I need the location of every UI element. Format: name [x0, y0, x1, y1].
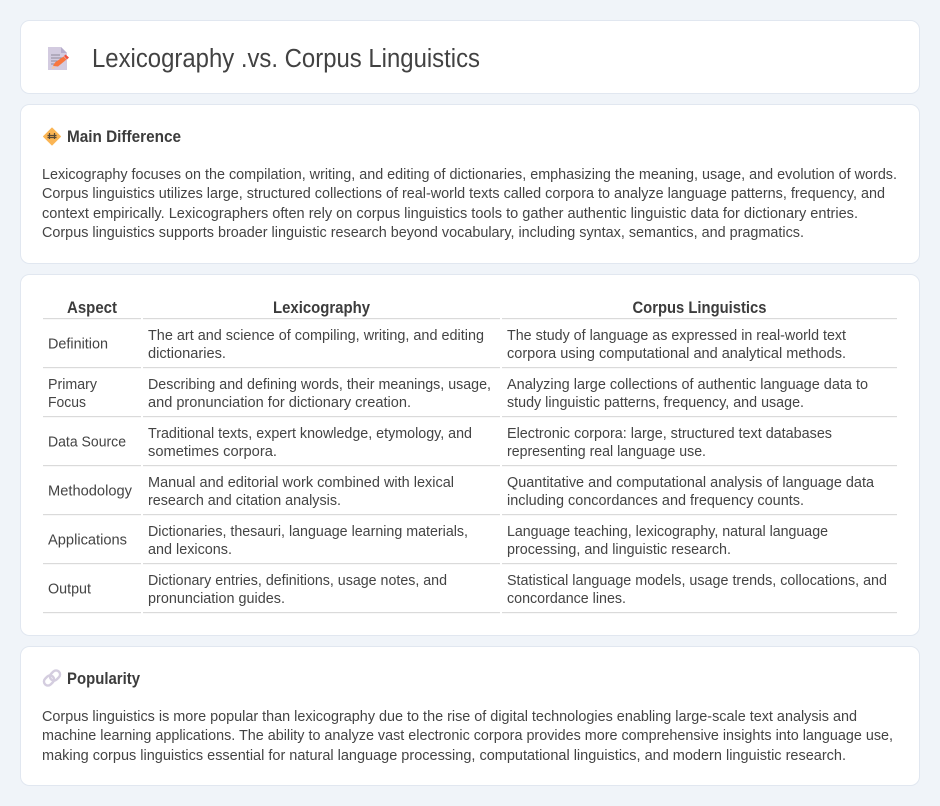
table row: applications: Applications	[48, 532, 127, 548]
heading: main difference: Main Difference	[67, 128, 181, 146]
table header row: Aspect	[67, 299, 117, 317]
table row: definition	[43, 328, 897, 368]
panel: popularity	[20, 646, 920, 786]
table row: data source: Electronic corpora: large, structured text databases	[507, 426, 832, 442]
text block: popularity paragraph	[42, 708, 893, 764]
title: Lexicography .vs. Corpus Linguistics	[92, 45, 480, 73]
text block: popularity paragraph: machine learning applications. The ability to analyze vast electronic corpora provides more comprehensive insights into language use,	[42, 727, 893, 744]
text block: main difference paragraph: context empirically. Lexicographers often rely on corpus linguistics tools to gather authentic linguistic data for dictionary entries.	[42, 205, 858, 222]
icon: link	[42, 669, 62, 687]
table row: applications: Dictionaries, thesauri, language learning materials,	[148, 524, 468, 540]
table row: primary focus: Describing and defining words, their meanings, usage,	[148, 377, 491, 393]
table row: output: pronunciation guides.	[148, 591, 285, 607]
table row: primary focus	[43, 377, 897, 417]
table row: primary focus: and pronunciation for dictionary creation.	[148, 395, 411, 411]
text block: main difference paragraph: Lexicography focuses on the compilation, writing, and editing of dictionaries, emphasizing the meaning, usage, and evolution of words.	[42, 166, 897, 183]
table row: definition: The art and science of compiling, writing, and editing	[148, 328, 484, 344]
text block: popularity paragraph: making corpus linguistics essential for natural language processing, computational linguistics, and modern linguistic research.	[42, 747, 846, 764]
table header row: Lexicography	[273, 299, 371, 317]
table row: data source: Traditional texts, expert knowledge, etymology, and	[148, 426, 472, 442]
table row: applications	[43, 524, 897, 564]
table row: primary focus: Analyzing large collections of authentic language data to	[507, 377, 868, 393]
icon: document with pencil	[48, 47, 69, 70]
text block: popularity paragraph: Corpus linguistics is more popular than lexicography due to the rise of digital technologies enabling large-scale text analysis and	[42, 708, 857, 725]
table row: methodology: Manual and editorial work combined with lexical	[148, 475, 454, 491]
table row: applications: processing, and linguistic research.	[507, 542, 731, 558]
table row: applications: Language teaching, lexicography, natural language	[507, 524, 828, 540]
table row: data source: Data Source	[48, 434, 126, 450]
table row: primary focus: Focus	[48, 395, 86, 411]
panel: comparison table	[20, 274, 920, 636]
panel: main difference	[20, 104, 920, 264]
table row: methodology: including concordances and frequency counts.	[507, 493, 804, 509]
text block: main difference paragraph	[42, 166, 897, 241]
table row: data source	[43, 426, 897, 466]
table row: data source: representing real language use.	[507, 444, 706, 460]
table row: applications: and lexicons.	[148, 542, 232, 558]
table row: methodology: Methodology	[48, 484, 133, 500]
table row: methodology: research and citation analysis.	[148, 493, 341, 509]
panel: header	[20, 20, 920, 94]
table row: output	[43, 573, 897, 613]
table row: output: Statistical language models, usage trends, collocations, and	[507, 573, 887, 589]
table row: primary focus: study linguistic patterns, frequency, and usage.	[507, 395, 804, 411]
table row: data source: sometimes corpora.	[148, 444, 277, 460]
heading: popularity: Popularity	[67, 670, 141, 688]
table header row	[43, 299, 897, 319]
text block: main difference paragraph: Corpus linguistics utilizes large, structured collections of real-world texts called corpora to analyze language patterns, frequency, and	[42, 185, 885, 202]
table row: primary focus: Primary	[48, 377, 98, 393]
table row: methodology	[43, 475, 897, 515]
table row: definition: dictionaries.	[148, 346, 226, 362]
table row: definition: corpora using computational and analytical methods.	[507, 346, 846, 362]
table row: definition: The study of language as expressed in real-world text	[507, 328, 846, 344]
table row: output: concordance lines.	[507, 591, 626, 607]
table header row: Corpus Linguistics	[632, 299, 766, 317]
icon: warning diamond	[44, 128, 60, 145]
table row: output: Dictionary entries, definitions, usage notes, and	[148, 573, 447, 589]
table row: methodology: Quantitative and computational analysis of language data	[507, 475, 875, 491]
table row: output: Output	[48, 582, 91, 598]
table row: definition: Definition	[48, 336, 108, 352]
text block: main difference paragraph: Corpus linguistics supports broader linguistic research beyond vocabulary, including syntax, semantics, and pragmatics.	[42, 224, 804, 241]
